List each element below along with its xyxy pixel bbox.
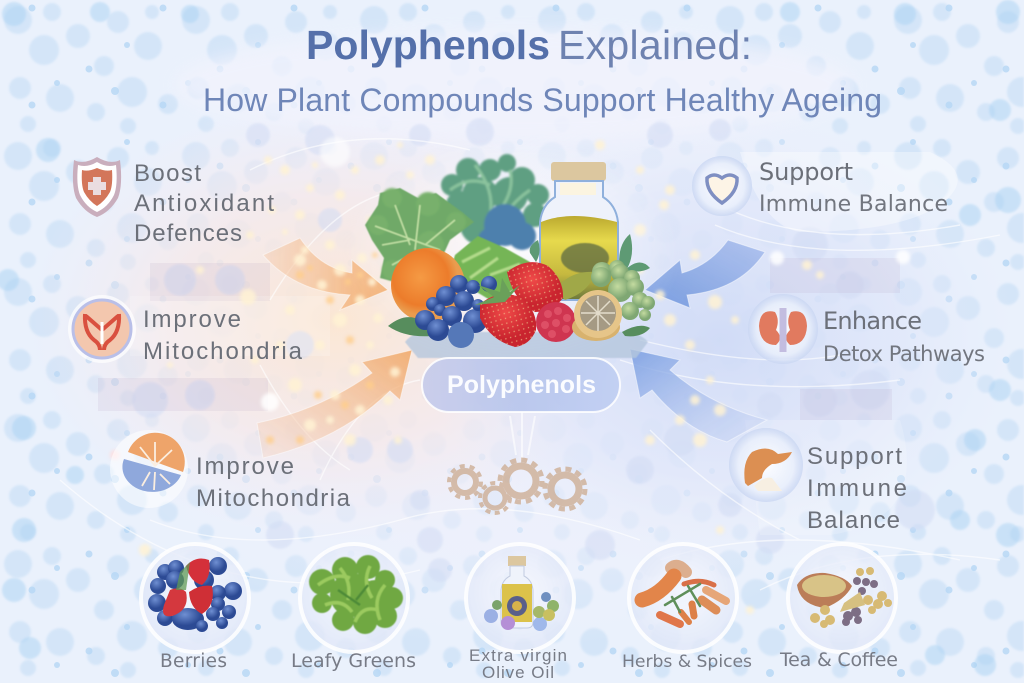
arrow: blue upper	[645, 240, 765, 308]
subtitle: How Plant Compounds Support Healthy Ageing	[203, 82, 882, 118]
oil leaves	[555, 272, 595, 300]
icon: liver	[729, 428, 803, 502]
icon: gears	[449, 460, 585, 513]
strawberry leaves	[475, 278, 520, 305]
bowl	[788, 544, 896, 652]
green grapes	[591, 260, 655, 321]
icon: shield	[73, 157, 121, 217]
bowl	[466, 544, 574, 652]
pill label: Polyphenols	[447, 371, 596, 399]
label	[807, 443, 907, 534]
orange	[391, 248, 465, 322]
arrow: orange lower	[257, 350, 412, 458]
label	[196, 453, 351, 512]
label: detox pathways: Detox Pathways	[823, 342, 985, 366]
polyphenols pill	[422, 358, 620, 412]
table surface	[405, 332, 648, 358]
benefit: improve mitochondria lower	[111, 431, 351, 512]
heading tail: Explained:	[558, 22, 752, 68]
label: Boost	[134, 160, 201, 187]
bowl	[141, 544, 249, 652]
label: Support	[759, 158, 853, 186]
label: Mitochondria	[196, 485, 351, 512]
bowl	[629, 544, 737, 652]
label: Immune	[807, 475, 907, 502]
label	[143, 306, 303, 365]
label: Leafy Greens	[291, 650, 416, 672]
spices	[642, 566, 726, 624]
herbs and gems	[484, 592, 559, 631]
lettuce	[450, 236, 530, 300]
lemon slices	[572, 290, 622, 341]
label: Balance	[807, 507, 900, 534]
label: immune balance: Immune Balance	[759, 192, 948, 217]
cap	[551, 162, 606, 181]
strawberry back	[507, 262, 563, 312]
central glow	[342, 135, 682, 365]
bowl	[300, 544, 408, 652]
arrow: blue lower	[630, 349, 767, 442]
arrow: orange upper	[263, 238, 388, 310]
icon: heart	[692, 156, 752, 216]
icon: kidneys	[748, 294, 818, 364]
berries	[148, 557, 242, 632]
source: leafy greens	[291, 544, 416, 672]
sparkles	[110, 137, 910, 614]
label: Defences	[134, 220, 242, 247]
benefit: boost antioxidant defences	[73, 157, 274, 247]
benefit: enhance detox pathways	[748, 294, 922, 364]
label: Olive Oil	[482, 663, 554, 682]
label: Support	[807, 443, 902, 470]
benefit: support immune balance lower	[729, 428, 907, 534]
label: Improve	[143, 306, 241, 333]
leaves under berries	[388, 317, 650, 336]
label: Improve	[196, 453, 294, 480]
food arrangement	[365, 154, 655, 358]
connector rays	[510, 412, 535, 460]
label: Tea & Coffee	[779, 649, 898, 671]
bottle	[501, 556, 533, 628]
benefit: support immune balance upper	[692, 156, 853, 216]
leafy greens	[365, 188, 474, 282]
source: olive oil	[466, 544, 574, 682]
blueberries	[415, 275, 497, 348]
bowl of beans	[797, 567, 892, 628]
label	[469, 646, 567, 682]
faint bands	[98, 258, 900, 420]
label: Mitochondria	[143, 338, 303, 365]
label: Herbs & Spices	[622, 652, 752, 672]
side leaves	[530, 234, 650, 272]
title	[203, 22, 882, 118]
icon: organ	[68, 295, 136, 363]
icon: tree and roots	[111, 431, 187, 507]
raspberry	[536, 302, 576, 342]
olive oil bottle	[540, 162, 618, 300]
heading: Polyphenols	[306, 22, 550, 68]
leafy greens	[309, 555, 403, 634]
label: Enhance	[823, 307, 922, 335]
label	[134, 160, 274, 247]
benefit: improve mitochondria upper	[68, 295, 303, 365]
label: Extra virgin	[469, 646, 567, 665]
label: Antioxidant	[134, 190, 274, 217]
label: Berries	[160, 651, 227, 672]
strawberry front	[480, 294, 536, 347]
source: berries	[141, 544, 249, 672]
source: tea and coffee	[779, 544, 898, 671]
kale	[441, 154, 549, 252]
source: herbs and spices	[622, 544, 752, 672]
